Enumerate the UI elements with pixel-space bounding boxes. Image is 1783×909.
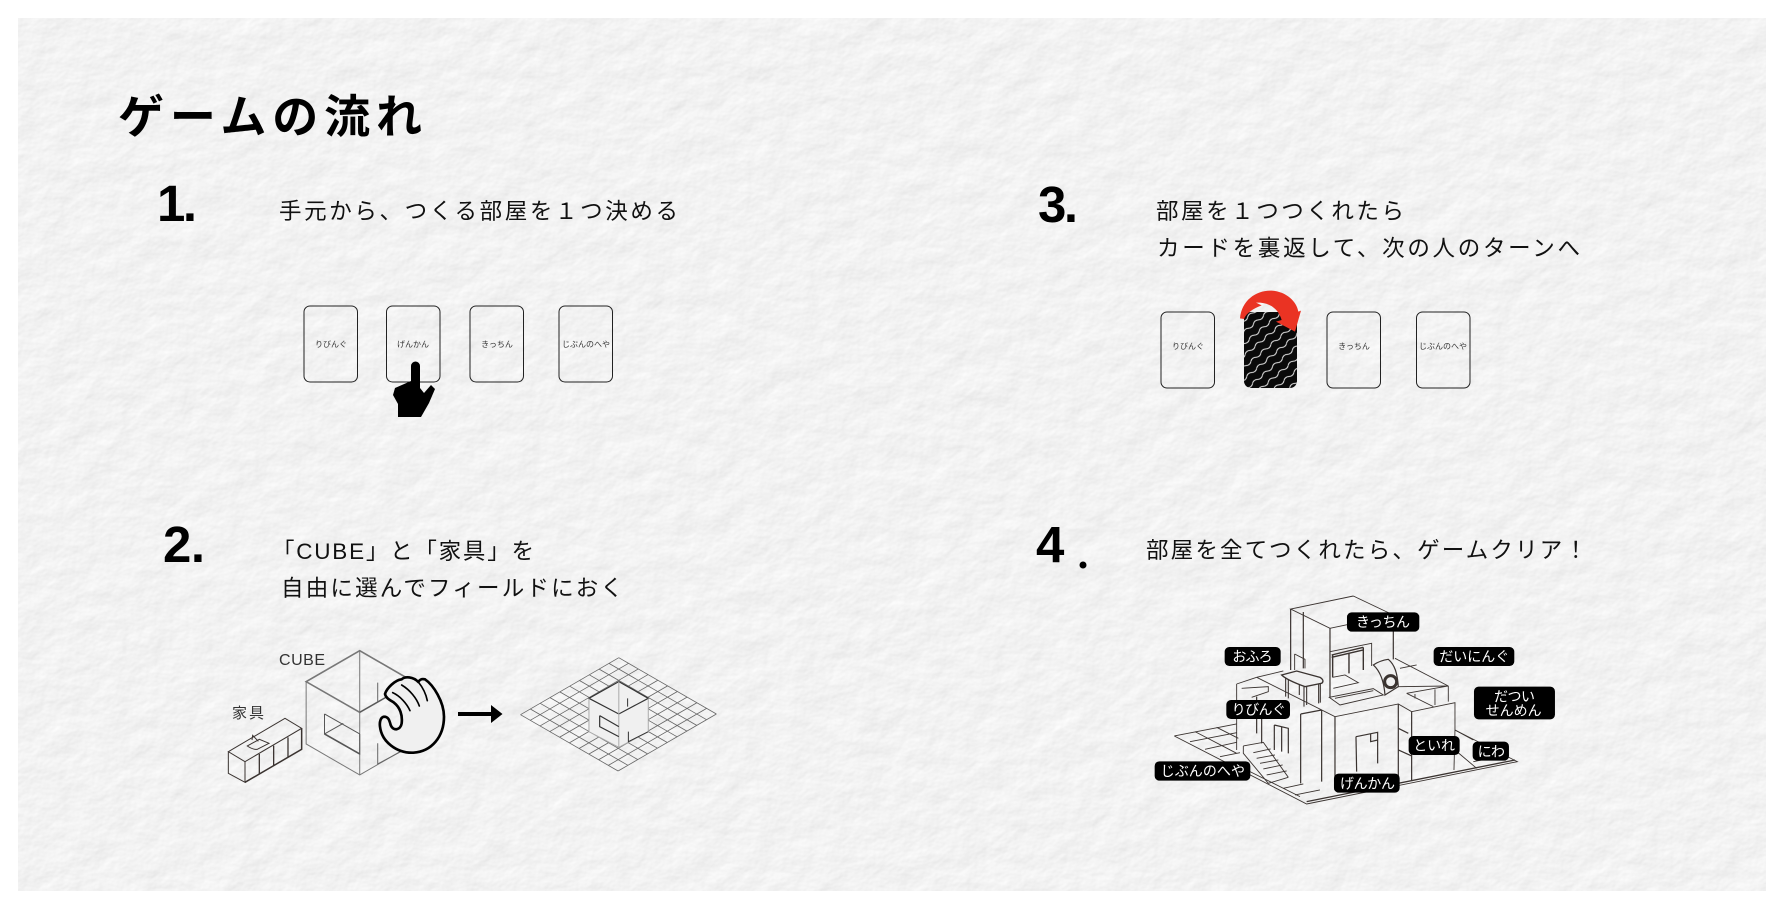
label: washroom: せんめん (1486, 703, 1542, 719)
label: entrance: げんかん (1340, 775, 1395, 791)
CUBE label: CUBE (279, 652, 325, 669)
step 3 instruction line 1: 部屋を１つつくれたら (1156, 199, 1404, 224)
step number 2: 2. (163, 516, 205, 573)
step 1 cards: りびんぐ (315, 340, 347, 349)
panel: step 2 (163, 516, 716, 782)
label: kitchen (1347, 612, 1419, 632)
step 3 cards (1161, 312, 1470, 388)
step 1 cards: げんかん (397, 340, 429, 349)
panel: step 4 (1036, 516, 1587, 804)
step number 1: 1. (157, 175, 197, 232)
step 2 instruction line 2: 自由に選んでフィールドにおく (281, 576, 623, 601)
arrow (458, 705, 502, 723)
label: washroom: だつい (1494, 688, 1535, 704)
step number 4: 4 (1036, 516, 1065, 573)
house illustration (1155, 596, 1555, 804)
step 3 cards: きっちん (1338, 342, 1370, 351)
label: dining: だいにんぐ (1439, 649, 1509, 665)
icon: open hand (380, 677, 444, 753)
cube on field (589, 682, 648, 747)
field grid (520, 658, 716, 771)
step 1 cards: きっちん (481, 340, 513, 349)
step 3 cards: じぶんのへや (1419, 342, 1467, 351)
furniture: kitchen counter (228, 718, 302, 782)
title: ゲームの流れ (118, 91, 422, 143)
label: toilet: といれ (1413, 738, 1455, 754)
label: living: りびんぐ (1232, 702, 1286, 718)
step 1 cards (304, 306, 612, 382)
step 3 cards: りびんぐ (1172, 342, 1204, 351)
label: own room: じぶんのへや (1161, 763, 1245, 779)
icon: red flip arrow (1240, 291, 1301, 332)
step number 4 period (1080, 562, 1086, 568)
step number 3: 3. (1038, 176, 1078, 233)
step 2 instruction line 1: 「CUBE」と「家具」を (272, 539, 534, 564)
panel: step 3 (1038, 176, 1580, 388)
step 1 cards: じぶんのへや (562, 340, 610, 349)
label: washroom (1474, 687, 1555, 719)
icon: pointing hand (393, 362, 435, 417)
panel: step 1 (157, 175, 678, 417)
step 1 instruction: 手元から、つくる部屋を１つ決める (279, 199, 678, 224)
label: bath: おふろ (1232, 649, 1273, 665)
cube (306, 651, 413, 775)
label: garden (1473, 742, 1509, 761)
label: garden: にわ (1478, 743, 1505, 759)
label: kitchen: きっちん (1356, 614, 1410, 630)
step 3 instruction line 2: カードを裏返して、次の人のターンへ (1157, 236, 1580, 261)
furniture label: 家具 (232, 705, 264, 722)
flipped card back (1244, 312, 1297, 388)
step 4 instruction: 部屋を全てつくれたら、ゲームクリア！ (1146, 538, 1587, 563)
label: toilet (1409, 736, 1460, 755)
label: bath (1225, 647, 1281, 666)
